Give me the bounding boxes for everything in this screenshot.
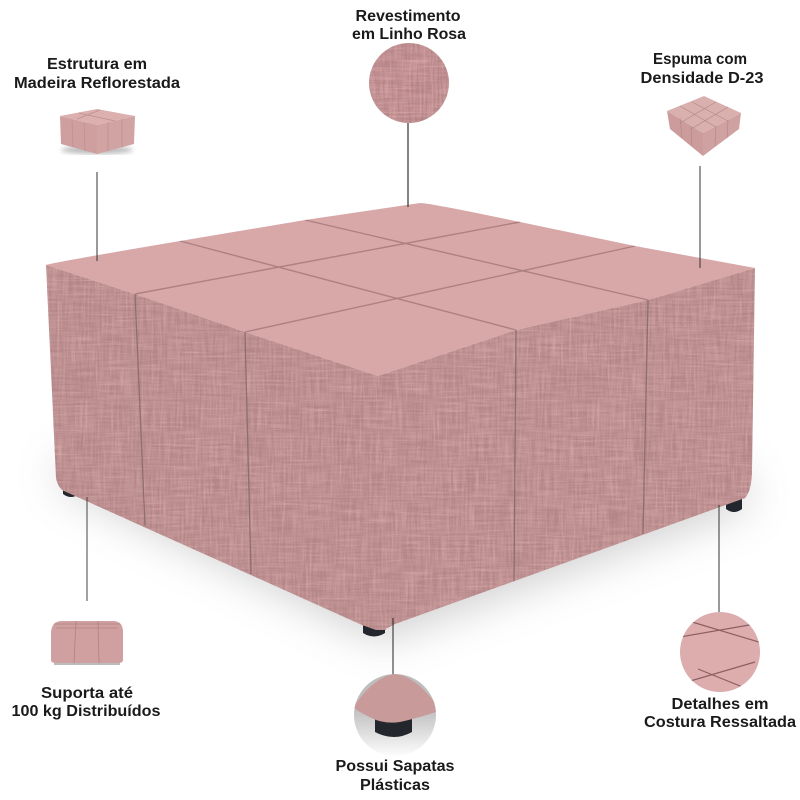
connector line: [407, 123, 409, 207]
callout: sapatas: Plásticas: [360, 777, 430, 794]
callout: estrutura: [14, 56, 180, 261]
heading: Suporta até: [41, 685, 133, 702]
right face: [375, 262, 760, 634]
callout: espuma: Densidade D-23: [640, 70, 764, 87]
floor shadow: [60, 460, 750, 640]
top seams: [135, 220, 648, 332]
callout: costura: [644, 505, 796, 731]
main ottoman: [40, 200, 760, 640]
callout: suporta: 100 kg Distribuídos: [12, 703, 161, 720]
heading: Detalhes em: [672, 696, 768, 713]
callout: revestimento: [352, 8, 466, 207]
connector line: [86, 497, 88, 601]
heading: Possui Sapatas: [336, 758, 455, 775]
connector line: [718, 505, 720, 612]
heading: Revestimento: [356, 8, 461, 25]
left face: [40, 260, 390, 635]
connector line: [392, 618, 394, 676]
icon: ottoman front view: [60, 109, 135, 154]
callout: costura: Costura Ressaltada: [644, 714, 796, 731]
callout: revestimento: em Linho Rosa: [352, 26, 466, 43]
foot: right: [726, 498, 742, 512]
callout: estrutura: Madeira Reflorestada: [14, 75, 180, 92]
callout: espuma: [640, 51, 764, 268]
foot: front: [363, 620, 385, 636]
icon: ottoman side view: [51, 621, 123, 664]
heading: Espuma com: [653, 51, 747, 68]
left face seams: [135, 294, 251, 574]
right face seams: [514, 300, 648, 582]
top face: [40, 200, 760, 380]
connector line: [699, 166, 701, 268]
callout: suporta: [12, 497, 161, 720]
icon: fabric swatch: [369, 43, 449, 123]
heading: Estrutura em: [47, 56, 147, 73]
icon: seam detail: [678, 610, 762, 694]
icon: foot detail: [354, 674, 438, 758]
icon: ottoman top view: [667, 96, 741, 156]
connector line: [96, 172, 98, 261]
foot: left: [63, 486, 79, 497]
callout: sapatas: [336, 618, 455, 794]
